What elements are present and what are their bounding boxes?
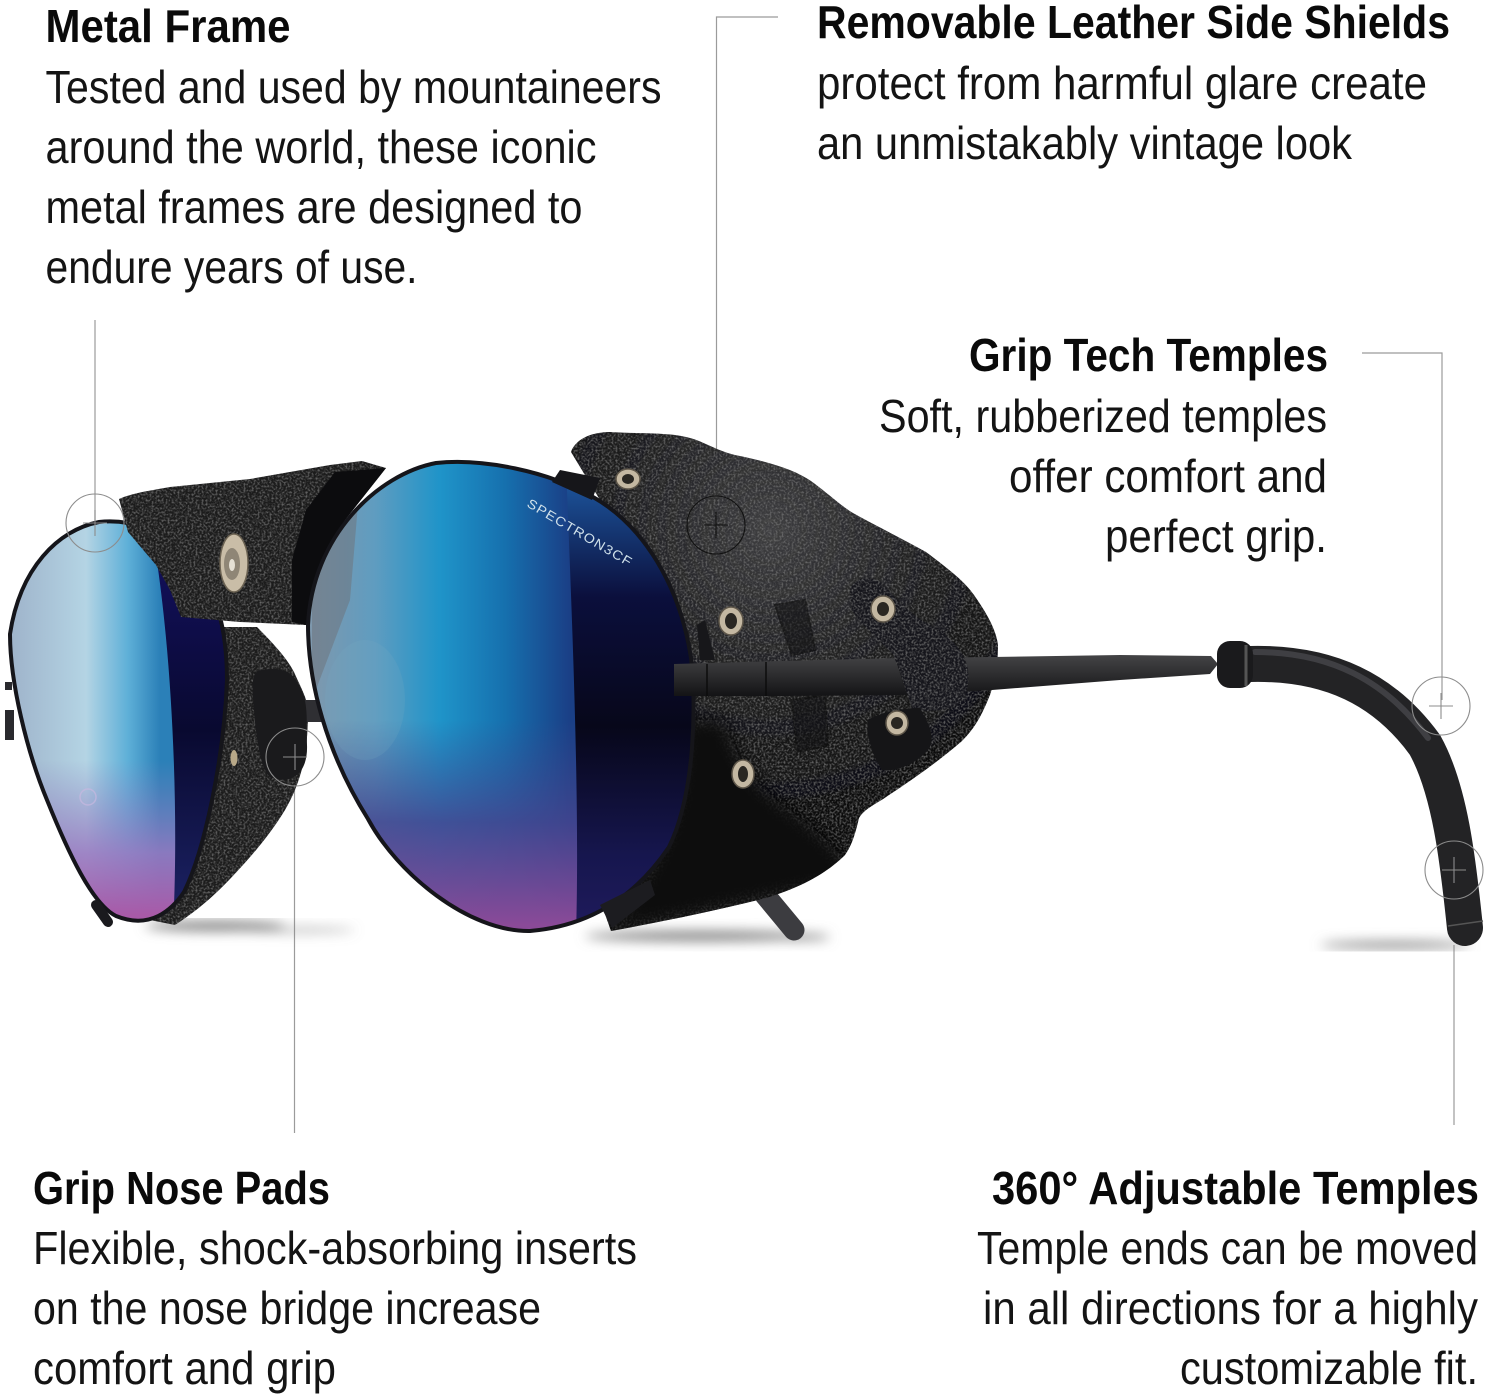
text block: grip nose pads: Grip Nose Pads — [33, 1162, 330, 1214]
temple collar — [1217, 641, 1253, 688]
text block: metal frame — [46, 0, 662, 293]
ground shadows — [145, 921, 1470, 948]
text block: metal frame: metal frames are designed to — [46, 181, 582, 233]
far temple tip — [765, 895, 794, 930]
rubber temple tip — [1250, 652, 1465, 928]
lower hinge — [600, 880, 655, 928]
text block: 360 adjustable temples: customizable fit. — [1180, 1342, 1478, 1394]
leader lines — [95, 17, 1454, 1133]
text block: grip nose pads: Flexible, shock-absorbing inserts — [33, 1222, 637, 1274]
lens brand text: SPECTRON3CF — [524, 496, 635, 570]
upper hinge — [552, 470, 600, 500]
text block: grip nose pads: comfort and grip — [33, 1342, 336, 1394]
right leather side shield — [571, 432, 998, 931]
text block: grip tech temples — [879, 329, 1328, 562]
text block: metal frame: endure years of use. — [46, 241, 418, 293]
text block: grip tech temples: perfect grip. — [1105, 510, 1327, 562]
marker: adjustable temple — [1425, 841, 1483, 899]
text block: leather side shields: protect from harmful glare create — [817, 57, 1427, 109]
marker: metal frame — [66, 494, 124, 552]
right lens glass — [300, 455, 700, 940]
marker: grip temples — [1412, 677, 1470, 735]
right frame rim — [308, 462, 694, 931]
leather snap — [220, 534, 248, 592]
lower leather strap — [868, 708, 932, 770]
text block: metal frame: Metal Frame — [46, 0, 290, 52]
shield embossed logo — [775, 600, 828, 752]
nose pads — [252, 669, 307, 780]
text block: leather side shields — [817, 0, 1450, 169]
left nose-side leather — [150, 627, 308, 925]
text block: grip tech temples: Soft, rubberized temples — [879, 390, 1327, 442]
text block: grip nose pads: on the nose bridge increase — [33, 1282, 541, 1334]
left hinge studs — [5, 682, 14, 740]
left lens glass — [12, 523, 225, 919]
text block: 360 adjustable temples — [977, 1162, 1479, 1394]
shield dark lower section — [600, 720, 850, 935]
text block: grip tech temples: Grip Tech Temples — [969, 329, 1328, 381]
text block: metal frame: Tested and used by mountaineers — [46, 61, 662, 113]
temple arm — [674, 655, 1218, 696]
text block: grip tech temples: offer comfort and — [1009, 450, 1327, 502]
text block: grip nose pads — [33, 1162, 637, 1394]
marker: nose pads — [266, 728, 324, 786]
callout markers — [66, 494, 1483, 899]
eyelet: inner left — [230, 750, 238, 766]
marker: side shield — [687, 496, 745, 554]
leather temple strap — [850, 578, 968, 711]
left frame rim — [10, 521, 227, 921]
bridge bar — [296, 700, 328, 722]
top leather flap — [119, 461, 386, 625]
text block: metal frame: around the world, these iconic — [46, 121, 596, 173]
eyelets — [616, 469, 908, 788]
illustration: sunglasses — [0, 432, 1483, 940]
flap inner fold — [292, 468, 386, 625]
text block: leather side shields: an unmistakably vintage look — [817, 117, 1353, 169]
